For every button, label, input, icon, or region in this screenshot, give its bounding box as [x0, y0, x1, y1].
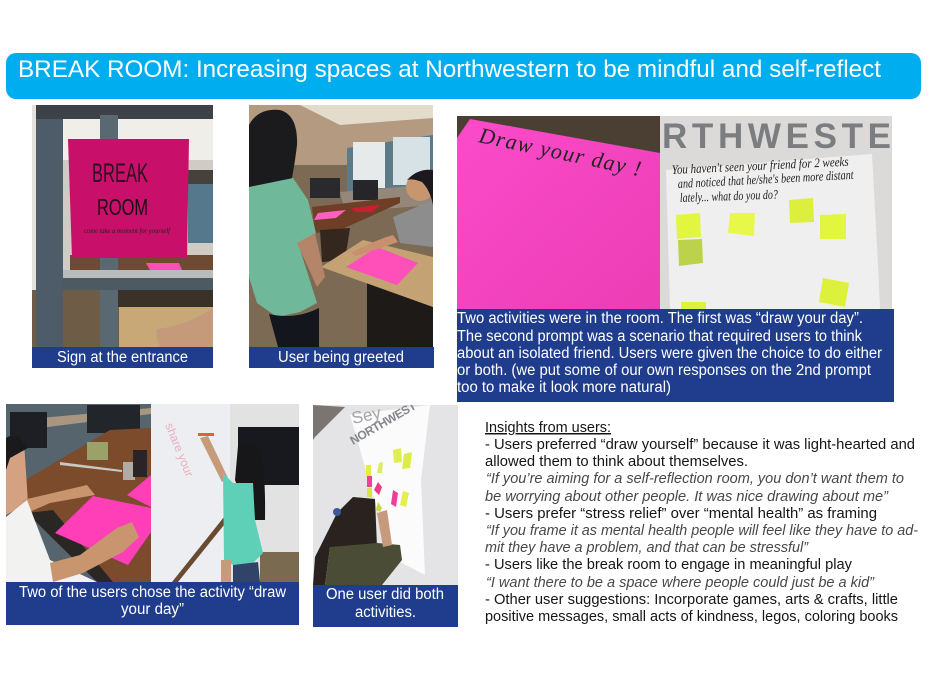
photo: user placing sticky notes on poster: Sey: [350, 403, 383, 428]
text block: insights from users: allowed them to think about themselves.: [485, 453, 748, 470]
photo: friend scenario poster: lately... what do you do?: [680, 187, 778, 205]
caption: two users chose draw your day: your day”: [121, 601, 184, 618]
caption: two activities description: [457, 309, 894, 402]
panel: one user did both: [313, 398, 458, 627]
panel: sign at the entrance: [32, 105, 213, 368]
panel: two activities: [457, 116, 894, 402]
photo: friend scenario poster: You haven't seen your friend for 2 weeks: [671, 154, 849, 177]
text block: insights from users: “I want there to be a space where people could just be a kid”: [486, 574, 875, 591]
sticky notes: [676, 198, 849, 310]
caption: sign at the entrance: Sign at the entrance: [57, 349, 188, 366]
text block: insights from users: - Users like the break room to engage in meaningful play: [485, 556, 852, 573]
text block: insights from users: mit they have a problem, and that can be stressful”: [485, 539, 809, 556]
text block: insights from users: be worrying about other people. It was nice drawing about me”: [485, 488, 889, 505]
sticky notes: [366, 448, 412, 512]
title banner: BREAK ROOM: Increasing spaces at Northwestern to be mindful and self-reflect: [18, 56, 881, 83]
caption: two users chose draw your day: [6, 582, 299, 625]
photo: user placing sticky notes on poster: NORTHWEST: [348, 398, 419, 448]
caption: two activities description: The second prompt was a scenario that required users to think: [457, 328, 862, 345]
sign: break room poster: [68, 139, 189, 258]
text block: insights from users: [485, 419, 918, 625]
text block: insights from users: - Users preferred “draw yourself” because it was light-hearted and: [485, 436, 915, 453]
photo: draw your day paper: Draw your day !: [476, 122, 644, 181]
photo: friend scenario poster: [660, 116, 892, 310]
caption: one user did both: One user did both: [326, 586, 444, 603]
text block: insights from users: positive messages, small acts of kindness, legos, coloring books: [485, 608, 898, 625]
text block: insights from users: Insights from users:: [485, 419, 611, 436]
caption: one user did both: [313, 585, 458, 627]
photo: friend scenario poster: RTHWESTE: [662, 117, 891, 156]
text block: insights from users: - Other user suggestions: Incorporate games, arts & crafts, little: [485, 591, 898, 608]
text block: insights from users: “If you frame it as mental health people will feel like they have to ad-: [486, 522, 918, 539]
caption: two users chose draw your day: Two of the users chose the activity “draw: [19, 584, 287, 601]
text block: insights from users: “If you’re aiming for a self-reflection room, you don’t want them to: [486, 470, 904, 487]
caption: sign at the entrance: [32, 347, 213, 368]
panel: user being greeted: [249, 105, 434, 368]
photo: user placing sticky notes on poster: [313, 398, 458, 585]
text block: insights from users: - Users prefer “stress relief” over “mental health” as framing: [485, 505, 877, 522]
caption: one user did both: activities.: [355, 604, 416, 621]
caption: two activities description: or both. (we put some of our own responses on the 2nd prompt: [457, 362, 872, 379]
sign: break room poster: BREAK: [92, 158, 148, 188]
photo: user writing on whiteboard: share your: [162, 421, 196, 479]
caption: two activities description: about an isolated friend. Users were given the choice to do either: [457, 345, 882, 362]
panel: users chose draw your day: [6, 404, 299, 625]
photo: user writing on whiteboard: [151, 404, 299, 582]
photo: friend scenario poster: and noticed that he/she's been more distant: [677, 167, 854, 191]
photo: draw your day paper: [457, 116, 660, 309]
sign: break room poster: ROOM: [97, 194, 148, 220]
caption: user being greeted: User being greeted: [278, 349, 404, 366]
photo: user drawing on pink paper: [6, 404, 151, 582]
sign: break room poster: come take a moment for yourself: [84, 226, 171, 235]
photo: door with break room sign: [32, 105, 213, 347]
title banner: [6, 53, 921, 99]
caption: two activities description: too to make it look more natural): [457, 379, 671, 396]
caption: two activities description: Two activities were in the room. The first was “draw your day”.: [457, 310, 863, 327]
photo: two people at a table: [249, 105, 434, 347]
caption: user being greeted: [249, 347, 434, 368]
